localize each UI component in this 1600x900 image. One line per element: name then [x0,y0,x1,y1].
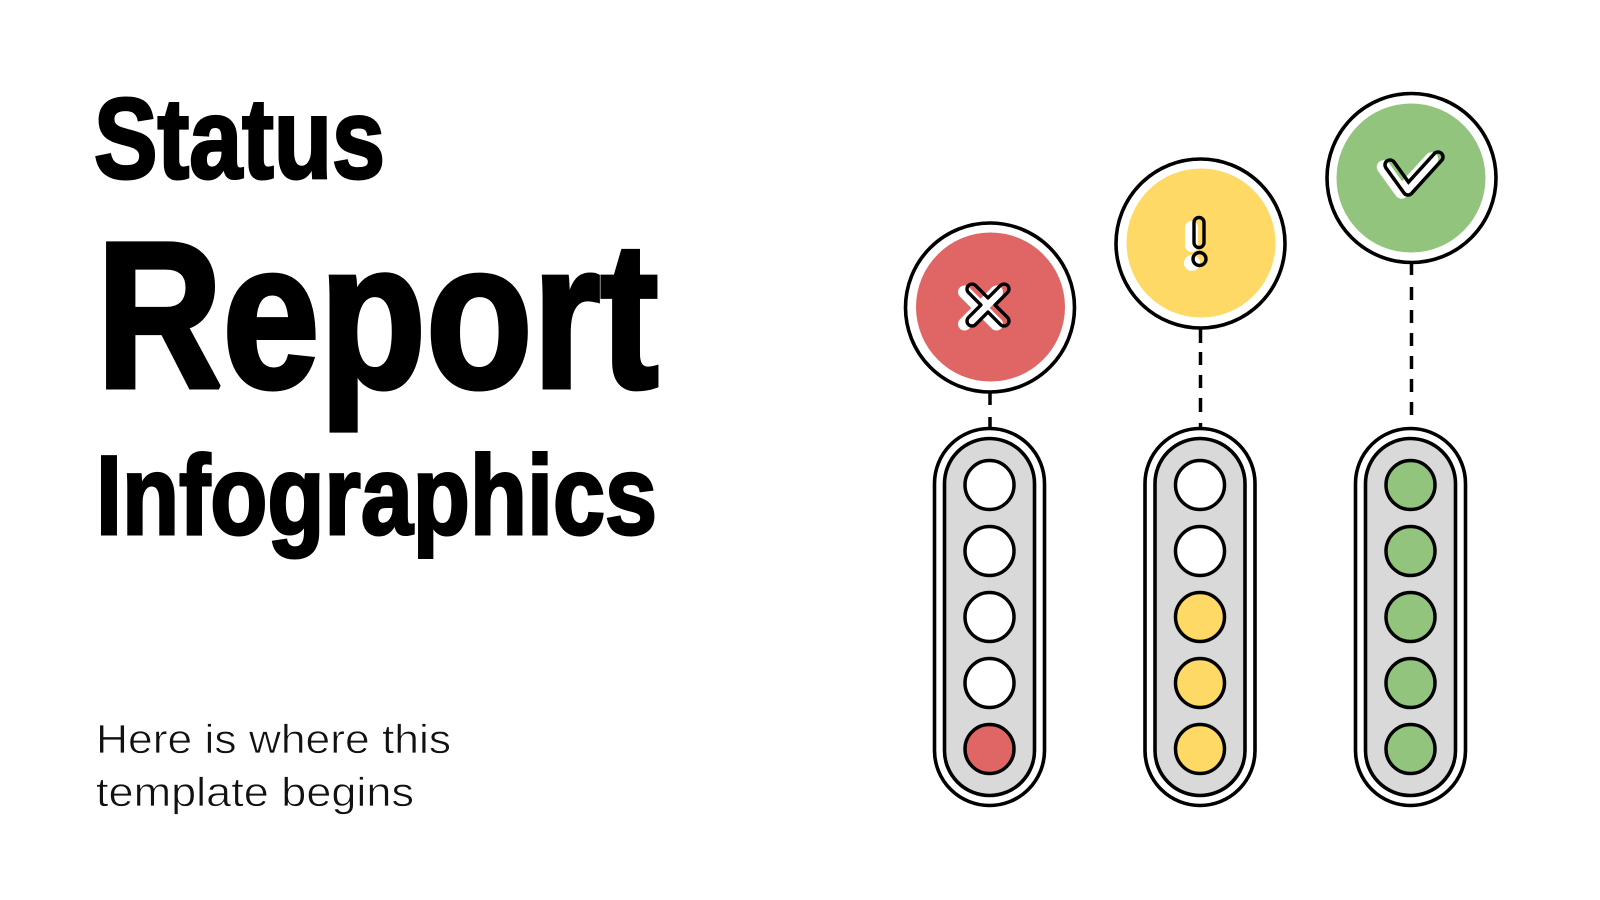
subtitle: Here is where this [96,716,451,762]
icon: cross [939,266,1027,349]
status column: yellow [1116,159,1285,806]
connector: dashed line [988,393,992,427]
subtitle: template begins [96,769,414,815]
meter: five-level red [934,428,1044,806]
icon: check mark [1376,150,1445,199]
status circle: yellow [1116,159,1285,328]
status column: red [906,223,1074,806]
title line: Status: Status [94,76,385,203]
status circle: green [1327,94,1496,262]
icon: exclamation mark [1184,218,1206,271]
title line: Report: Report [96,200,658,432]
status circle: red [906,223,1074,392]
meter: five-level green [1356,428,1466,806]
status column: green [1327,94,1496,806]
connector: dashed line [1410,263,1413,415]
title line: Infographics: Infographics [96,433,657,558]
connector: dashed line [1199,329,1202,427]
subtitle [96,716,451,815]
title [94,76,658,558]
meter: five-level yellow [1145,428,1255,806]
